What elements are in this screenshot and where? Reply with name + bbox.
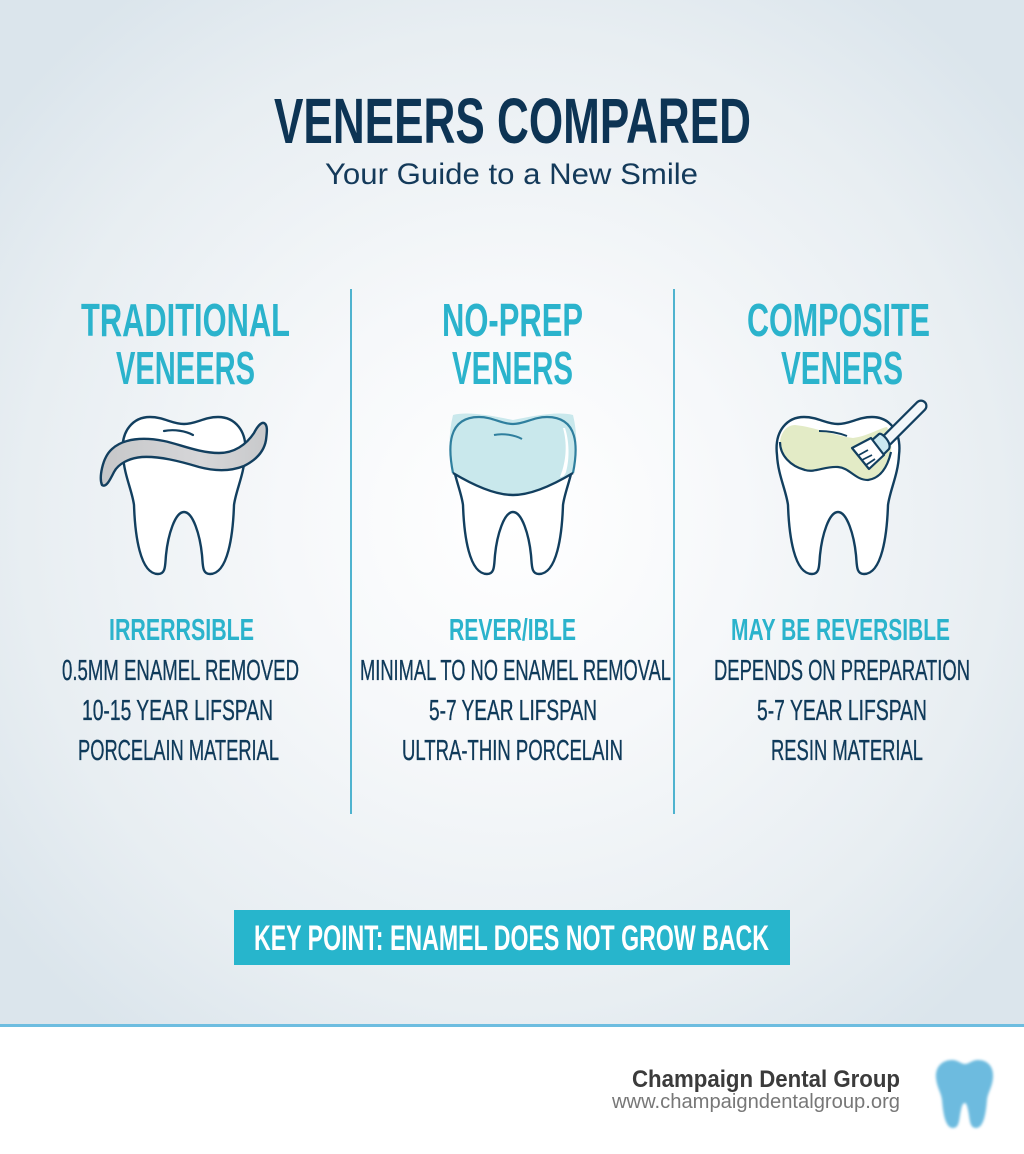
text block: no-prep facts: ULTRA-THIN PORCELAIN (402, 735, 623, 767)
text block: composite facts (714, 655, 970, 767)
title: VENEERS COMPARED (274, 85, 751, 157)
heading: composite veneers (747, 294, 930, 394)
text block: traditional facts: 0.5MM ENAMEL REMOVED (62, 655, 299, 687)
panel: traditional veneers (62, 294, 299, 767)
subheading: irreversible: IRRERRSIBLE (109, 612, 254, 647)
icon: tooth with resin and brush (777, 406, 921, 574)
callout: key point (234, 910, 790, 965)
heading: no-prep veneers (442, 294, 583, 394)
icon: tooth with veneer strip (101, 417, 267, 574)
icon: footer tooth logo (936, 1060, 993, 1128)
heading: composite veneers: VENERS (781, 342, 903, 394)
heading: composite veneers: COMPOSITE (747, 294, 930, 346)
text block: composite facts: 5-7 YEAR LIFSPAN (757, 695, 927, 727)
footer: company name: Champaign Dental Group (632, 1066, 900, 1093)
heading: traditional veneers (81, 294, 290, 394)
footer (0, 1024, 1024, 1154)
subheading: reversible: REVER/IBLE (449, 612, 576, 647)
text block: no-prep facts (360, 655, 671, 767)
text block: composite facts: RESIN MATERIAL (771, 735, 923, 767)
text block: no-prep facts: MINIMAL TO NO ENAMEL REMOVAL (360, 655, 671, 687)
heading: traditional veneers: VENEERS (116, 342, 255, 394)
subtitle: Your Guide to a New Smile (325, 158, 698, 191)
text block: no-prep facts: 5-7 YEAR LIFSPAN (429, 695, 597, 727)
panel: composite veneers (714, 294, 970, 767)
text block: traditional facts: 10-15 YEAR LIFSPAN (82, 695, 273, 727)
heading: traditional veneers: TRADITIONAL (81, 294, 290, 346)
heading: no-prep veneers: NO-PREP (442, 294, 583, 346)
text block: traditional facts (62, 655, 299, 767)
callout: key point: KEY POINT: ENAMEL DOES NOT GROW BACK (254, 919, 769, 958)
heading: no-prep veneers: VENERS (452, 342, 573, 394)
panel: no-prep veneers (360, 294, 671, 767)
text block: traditional facts: PORCELAIN MATERIAL (78, 735, 279, 767)
icon: tooth with thin shell (450, 414, 576, 574)
footer: website: www.champaigndentalgroup.org (611, 1091, 900, 1113)
